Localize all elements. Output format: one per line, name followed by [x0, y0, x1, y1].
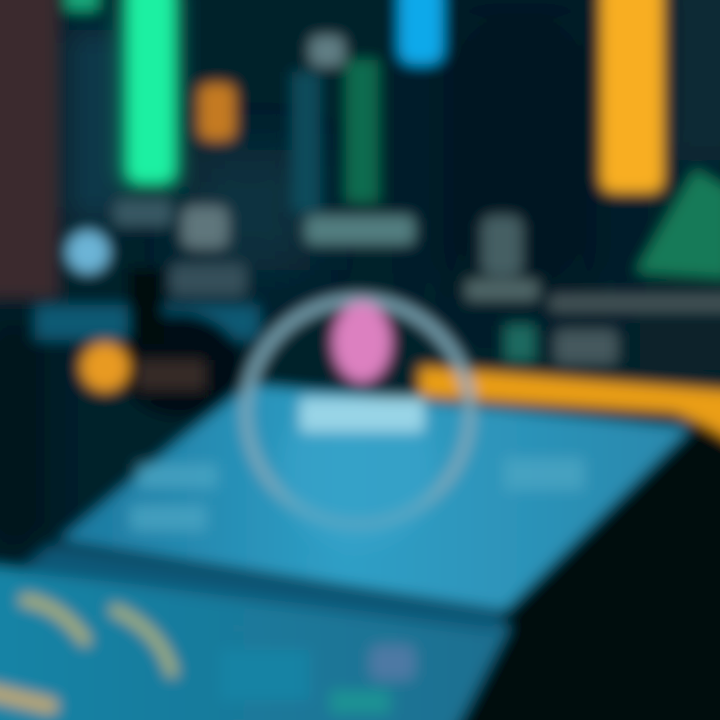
label blobs: right group — [466, 216, 720, 370]
left dark column — [0, 320, 50, 550]
label blob: under bars — [306, 216, 414, 244]
bar: bright green — [128, 0, 174, 182]
bar: blue — [399, 0, 443, 64]
panel shadow — [20, 545, 505, 632]
heading blob — [300, 398, 424, 432]
label blob: top of bars — [310, 36, 344, 66]
icon: light blue dot — [67, 231, 109, 273]
panel text blobs — [130, 458, 584, 531]
left wall panel — [0, 0, 58, 298]
bar: yellow — [601, 0, 663, 192]
lower panel — [0, 565, 510, 720]
ring — [246, 300, 470, 524]
label blobs: left group — [114, 200, 246, 296]
bar: green top fragment — [66, 0, 98, 10]
dark blob — [118, 313, 242, 417]
orange dot — [81, 343, 129, 391]
glow: green — [118, 0, 182, 190]
small bottom marks — [220, 645, 415, 714]
bar: orange small — [199, 84, 235, 140]
icon: green triangle — [636, 170, 720, 278]
pink ellipse — [333, 302, 391, 382]
bar: dark green — [346, 60, 378, 202]
teal strip left — [35, 305, 260, 340]
dark post — [128, 268, 164, 344]
main blue panel — [60, 385, 690, 610]
gauges bottom left — [0, 600, 172, 706]
orange band — [420, 367, 720, 445]
bar: dark teal — [292, 72, 320, 212]
ring inner tint — [280, 392, 436, 548]
orange dot label — [137, 360, 205, 390]
